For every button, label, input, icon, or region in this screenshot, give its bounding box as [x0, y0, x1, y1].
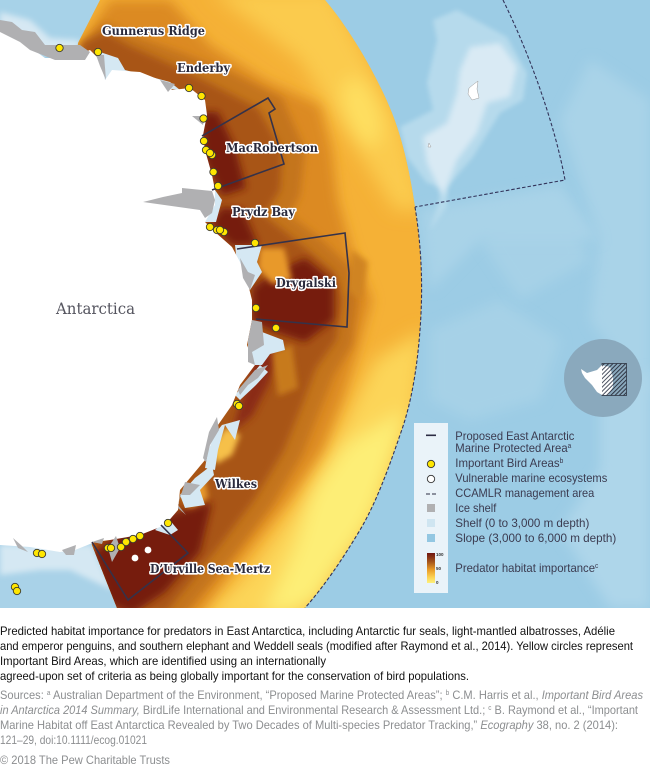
- continent: [0, 30, 255, 552]
- shelf along coast: [100, 52, 285, 535]
- legend: predator habitat importance scale: 100: [436, 552, 444, 557]
- legend: shelf: [427, 518, 589, 530]
- brown contour: [80, 32, 342, 612]
- proposed marine protected areas: [92, 98, 349, 600]
- legend: predator habitat importance scale: [427, 552, 599, 585]
- mid contour: [80, 22, 358, 615]
- legend: predator habitat importance scale: 50: [436, 566, 442, 571]
- locator inset: [564, 339, 642, 417]
- sources: b: [446, 690, 449, 697]
- sources: B. Raymond et al., “Important: [492, 703, 639, 717]
- region labels: MacRobertson: [226, 140, 318, 155]
- sources: a: [47, 690, 51, 697]
- Kerguelen plateau: [400, 10, 527, 230]
- sources: c: [488, 705, 492, 712]
- sources: Important Bird Areas: [542, 688, 643, 702]
- sources: [0, 688, 643, 747]
- legend: slope: Slope (3,000 to 6,000 m depth): [455, 531, 616, 545]
- legend: CCAMLR: CCAMLR management area: [455, 486, 595, 500]
- important bird areas: [11, 44, 280, 595]
- sources: Marine Habitat off East Antarctica Revealed by Two Decades of Multi-species Predator Tracking,” Ecography 38, no. 2 (2014):: [0, 718, 618, 732]
- region labels: Prydz Bay: [232, 204, 296, 219]
- coastal shelf, west: [0, 0, 125, 608]
- sources: Sources:: [0, 688, 47, 702]
- caption: agreed-upon set of criteria as being globally important for the conservation of bird populations.: [0, 669, 469, 683]
- region labels: Wilkes: [214, 476, 257, 491]
- legend: important bird areas: [426, 458, 564, 470]
- sources: Australian Department of the Environment, “Proposed Marine Protected Areas”;: [50, 688, 446, 702]
- legend: vulnerable marine ecosystems: [426, 474, 607, 484]
- orange contour: [80, 0, 372, 615]
- legend: predator habitat importance scale: Predator habitat importance: [455, 561, 603, 575]
- legend: important bird areas: b: [560, 458, 563, 465]
- legend: ice shelf: Ice shelf: [455, 501, 497, 515]
- legend: [414, 423, 616, 593]
- legend: slope: [427, 534, 616, 544]
- legend: marine protected area: Proposed East Antarctic: [455, 429, 574, 443]
- region labels: Gunnerus Ridge: [102, 23, 205, 38]
- CCAMLR management area boundary: [305, 0, 565, 608]
- legend: important bird areas: Important Bird Areas: [455, 456, 565, 470]
- legend: marine protected area: a: [568, 443, 571, 450]
- sources: 121–29, doi:10.1111/ecog.01021: [0, 733, 147, 747]
- habitat importance surface: [78, 0, 422, 608]
- vulnerable marine ecosystems: [132, 547, 151, 561]
- region labels: [102, 23, 336, 576]
- sources: in Antarctica 2014 Summary, BirdLife International and Environmental Research & Assessment Ltd.;: [0, 703, 517, 717]
- legend: marine protected area: [426, 432, 574, 452]
- legend: ice shelf: [427, 504, 496, 512]
- caption: Important Bird Areas, which are identified using an internationally: [0, 654, 326, 668]
- sources: C.M. Harris et al.,: [449, 688, 542, 702]
- ocean background: [0, 0, 650, 608]
- region labels: Enderby: [177, 60, 231, 75]
- legend: predator habitat importance scale: 0: [436, 580, 439, 585]
- legend: predator habitat importance scale: c: [595, 563, 599, 570]
- dark core areas: [92, 112, 334, 614]
- caption: [0, 624, 634, 683]
- copyright: © 2018 The Pew Charitable Trusts: [0, 753, 170, 767]
- legend: marine protected area: Marine Protected Area: [455, 441, 575, 455]
- continent label: Antarctica: [55, 299, 135, 318]
- legend: shelf: Shelf (0 to 3,000 m depth): [455, 516, 589, 530]
- region labels: Drygalski: [276, 275, 336, 290]
- caption: Predicted habitat importance for predators in East Antarctica, including Antarctic fur seals, light-mantled albatrosses, Adélie: [0, 624, 615, 638]
- legend: vulnerable marine ecosystems: Vulnerable marine ecosystems: [455, 471, 607, 485]
- yellow highlights: [200, 0, 425, 620]
- orange pockets near the coast: [182, 248, 368, 508]
- region labels: D’Urville Sea-Mertz: [150, 561, 270, 576]
- ice shelves: [0, 20, 268, 562]
